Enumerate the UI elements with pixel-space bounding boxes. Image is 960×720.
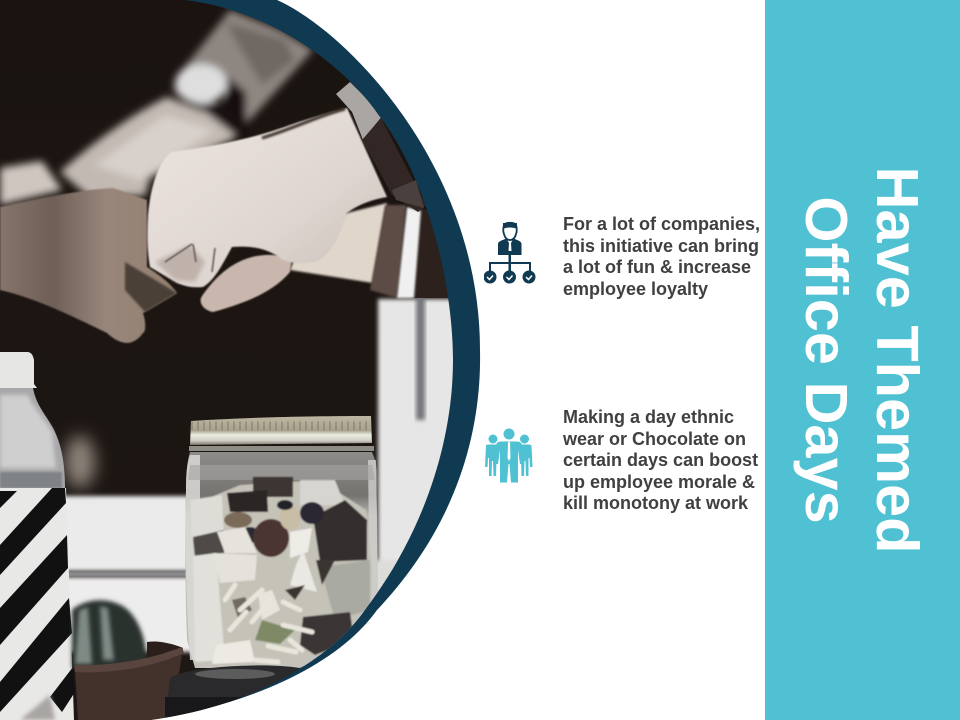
- glass jar with trail mix: [185, 416, 378, 668]
- lower fist: [201, 255, 292, 312]
- text: first point: a lot of fun & increase: [563, 257, 751, 277]
- blurred white wall and table: [60, 290, 458, 652]
- icon: team of three people: [485, 428, 532, 482]
- water bottle: [0, 352, 75, 720]
- photo: fist bump and snack jar inside navy arc: [0, 0, 480, 720]
- icon: manager with hierarchy: [484, 222, 536, 284]
- text: first point: employee loyalty: [563, 279, 708, 299]
- text: second point: wear or Chocolate on: [563, 429, 746, 449]
- text: first point: For a lot of companies,: [563, 214, 760, 234]
- text: second point: [563, 407, 758, 513]
- jar lid: [189, 416, 374, 451]
- trail mix: [190, 477, 372, 665]
- striped bottle label: [0, 488, 75, 720]
- text: second point: kill monotony at work: [563, 493, 748, 513]
- photo background: [0, 0, 480, 720]
- front wrist strap: [336, 82, 426, 212]
- text: Have Themed: [864, 166, 930, 553]
- text: Office Days: [792, 196, 860, 523]
- cactus in pot: [72, 600, 184, 720]
- panel: teal title band: [765, 0, 960, 720]
- text: first point: this initiative can bring: [563, 236, 759, 256]
- title: [792, 166, 930, 553]
- text: second point: Making a day ethnic: [563, 407, 734, 427]
- front fist: [147, 108, 387, 287]
- second arm behind fist: [290, 203, 387, 283]
- back arm with watch: [0, 10, 313, 205]
- right wrist watch and strap: [369, 204, 448, 300]
- navy arc: [140, 0, 480, 720]
- black lid in foreground: [165, 665, 300, 720]
- text: second point: certain days can boost: [563, 450, 758, 470]
- text: first point: [563, 214, 760, 299]
- text: second point: up employee morale &: [563, 472, 755, 492]
- left hand: [0, 188, 177, 343]
